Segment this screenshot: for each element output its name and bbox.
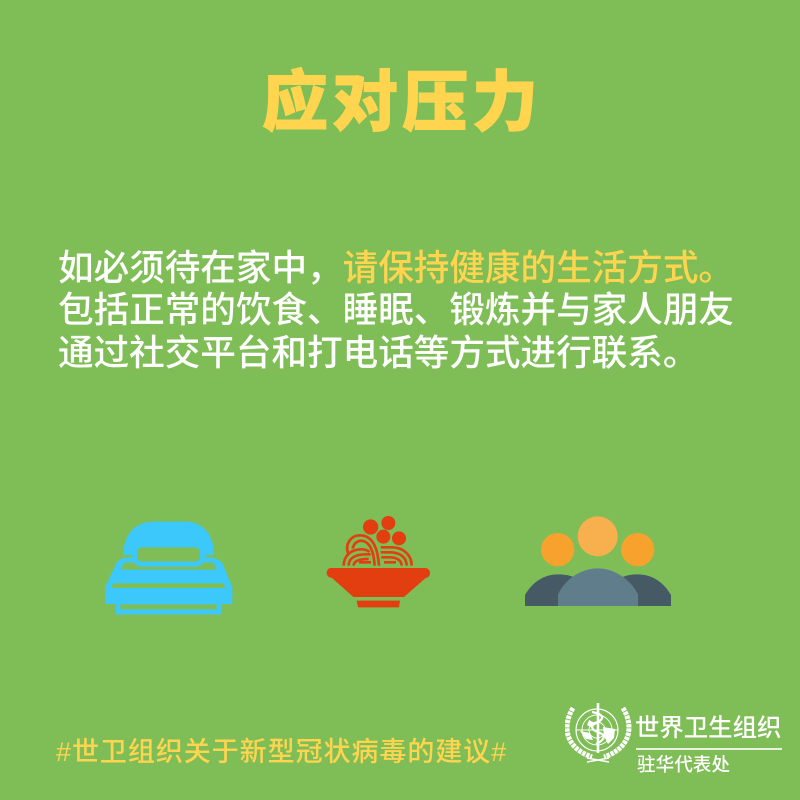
body text: 如必须待在家中，请保持健康的生活方式。 bbox=[58, 248, 734, 288]
icon: WHO emblem bbox=[565, 703, 632, 763]
icon: bed bbox=[105, 522, 232, 614]
hashtag: #世卫组织关于新型冠状病毒的建议# bbox=[56, 737, 507, 767]
icon: noodle bowl bbox=[326, 516, 430, 608]
icon: group of people bbox=[525, 516, 671, 606]
office name: 驻华代表处 bbox=[637, 754, 730, 775]
body text: 通过社交平台和打电话等方式进行联系。 bbox=[58, 333, 698, 373]
organisation name: 世界卫生组织 bbox=[635, 715, 781, 742]
body text: 包括正常的饮食、睡眠、锻炼并与家人朋友 bbox=[58, 290, 734, 330]
WHO logo bbox=[565, 703, 782, 775]
body text bbox=[58, 248, 734, 373]
title: 应对压力 bbox=[262, 65, 542, 139]
divider line bbox=[636, 748, 782, 750]
